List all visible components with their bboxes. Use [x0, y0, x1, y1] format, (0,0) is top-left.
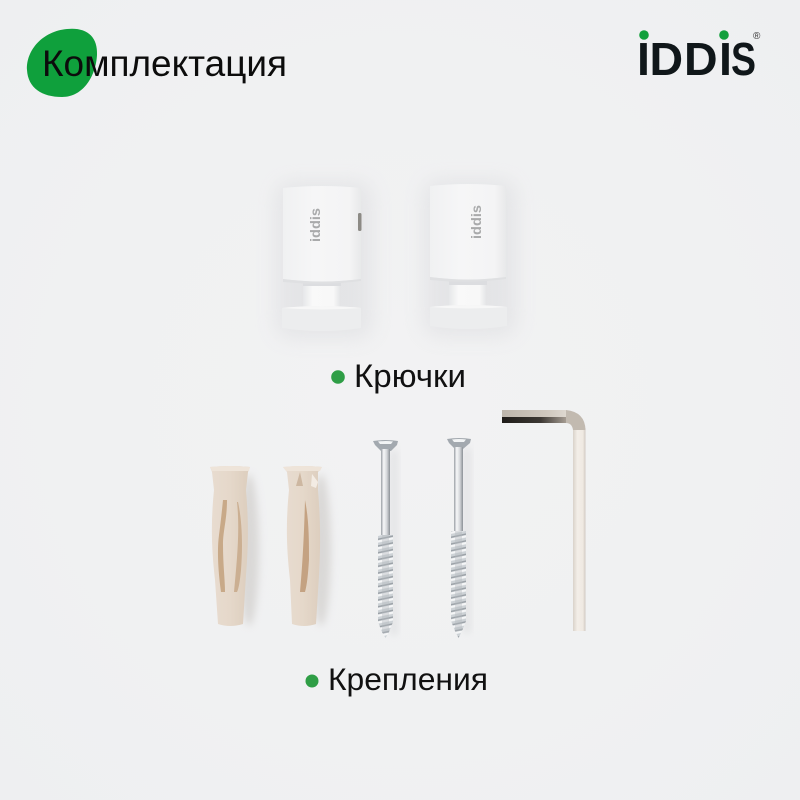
label: Крепления: [306, 661, 488, 697]
bullet: [306, 674, 318, 688]
screw right: [447, 438, 471, 638]
bullet: [331, 370, 345, 384]
screws: [373, 438, 471, 638]
logo wordmark: I: [637, 33, 650, 85]
logo wordmark: D: [650, 33, 683, 85]
title text: Комплектация: [42, 42, 287, 84]
label text: Крючки: [354, 358, 466, 394]
label text: Крепления: [328, 661, 488, 697]
hex key: [502, 410, 588, 631]
logo wordmark: [637, 33, 756, 85]
logo wordmark: S: [731, 33, 756, 85]
hook right: [424, 180, 516, 336]
plug left: [210, 466, 259, 626]
hook left: iddis: [307, 208, 323, 242]
label: Крючки: [331, 358, 466, 394]
registered mark: ®: [753, 31, 761, 42]
wall plugs: [210, 466, 331, 626]
green blob: [27, 29, 97, 97]
logo wordmark: I: [719, 33, 732, 85]
logo: IDDIS: [637, 30, 761, 85]
screw left: [373, 440, 398, 638]
logo wordmark: D: [684, 33, 718, 85]
hook right: iddis: [468, 205, 484, 239]
plug right: [283, 466, 331, 626]
hook left: [276, 182, 372, 338]
title: Комплектация with green blob: [27, 29, 287, 97]
hooks: [276, 180, 516, 338]
logo green dots: [639, 30, 729, 40]
